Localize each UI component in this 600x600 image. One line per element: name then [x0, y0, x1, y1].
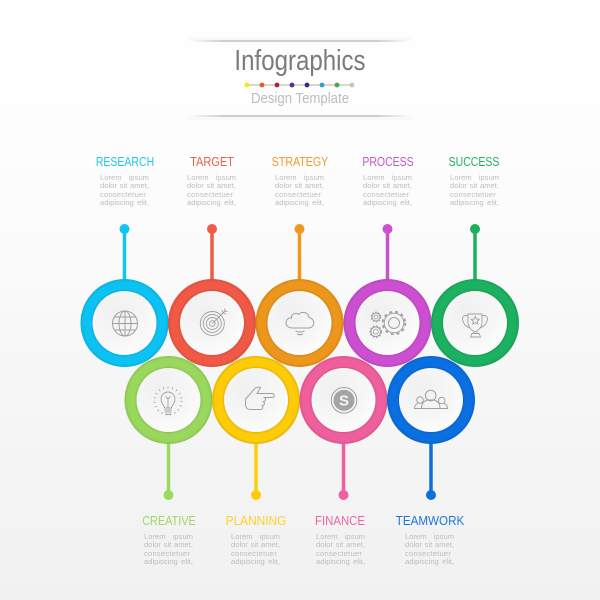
text: strategy body: consectetuer: [275, 190, 321, 199]
text: creative body: dolor sit amet,: [144, 540, 193, 549]
icon: pointing hand: [246, 387, 274, 410]
text: success body: Lorem ipsum: [450, 172, 499, 182]
subheading: Design Template: Design Template: [251, 90, 349, 107]
text: target body: dolor sit amet,: [187, 181, 236, 190]
text: success body: consectetuer: [450, 190, 496, 199]
node: target: [168, 224, 256, 367]
text: finance body: dolor sit amet,: [316, 540, 365, 549]
text: finance body: adipiscing elit,: [316, 557, 365, 566]
node: creative: [124, 356, 212, 500]
icon: lightbulb: [154, 388, 182, 414]
title block: [194, 40, 406, 117]
text: teamwork body: consectetuer: [405, 549, 451, 558]
text: creative body: [144, 532, 193, 566]
colored dot line: [244, 82, 354, 88]
text: strategy body: adipiscing elit,: [275, 198, 324, 207]
text: process body: [363, 172, 412, 207]
label: TARGET: TARGET: [190, 155, 234, 169]
label: FINANCE: FINANCE: [315, 514, 365, 528]
icon: dollar coin: [331, 388, 357, 413]
text: creative body: consectetuer: [144, 549, 190, 558]
text: success body: [450, 172, 499, 207]
label: RESEARCH: RESEARCH: [96, 155, 154, 169]
label: PLANNING: PLANNING: [225, 514, 286, 528]
node: planning: [212, 356, 300, 500]
node: finance: [300, 356, 388, 500]
text: teamwork body: dolor sit amet,: [405, 540, 454, 549]
text: target body: adipiscing elit,: [187, 198, 236, 207]
icon: team: [414, 390, 448, 408]
text: strategy body: Lorem ipsum: [275, 172, 324, 182]
label: PROCESS: PROCESS: [362, 155, 413, 169]
text: process body: dolor sit amet,: [363, 181, 412, 190]
text: research body: adipiscing elit,: [100, 198, 149, 207]
text: planning body: Lorem ipsum: [231, 532, 280, 540]
text: teamwork body: Lorem ipsum: [405, 532, 454, 540]
text: process body: Lorem ipsum: [363, 172, 412, 182]
icon: dollar coin: S: [339, 392, 349, 410]
text: finance body: [316, 532, 365, 566]
icon: globe: [112, 311, 138, 336]
text: creative body: Lorem ipsum: [144, 532, 193, 540]
bottom title rule: [188, 115, 412, 117]
label: TEAMWORK: TEAMWORK: [395, 514, 464, 528]
node: strategy: [256, 224, 344, 367]
text: planning body: [231, 532, 280, 566]
heading: Infographics: Infographics: [234, 45, 366, 77]
text: finance body: Lorem ipsum: [316, 532, 365, 540]
node: teamwork: [387, 356, 475, 500]
text: teamwork body: [405, 532, 454, 566]
text: research body: consectetuer: [100, 190, 146, 199]
label: CREATIVE: CREATIVE: [142, 514, 196, 528]
node: success: [431, 224, 519, 367]
icon: gears: [370, 312, 405, 337]
text: strategy body: dolor sit amet,: [275, 181, 324, 190]
text: success body: adipiscing elit,: [450, 198, 499, 207]
text: teamwork body: adipiscing elit,: [405, 557, 454, 566]
top title rule: [188, 40, 412, 42]
text: research body: [100, 172, 149, 207]
text: target body: consectetuer: [187, 190, 233, 199]
text: target body: Lorem ipsum: [187, 172, 236, 182]
text: planning body: consectetuer: [231, 549, 277, 558]
text: process body: adipiscing elit,: [363, 198, 412, 207]
icon: target: [200, 308, 228, 336]
icon: cloud: [286, 312, 314, 335]
text: success body: dolor sit amet,: [450, 181, 499, 190]
text: planning body: dolor sit amet,: [231, 540, 280, 549]
text: target body: [187, 172, 236, 207]
text: creative body: adipiscing elit,: [144, 557, 193, 566]
text: research body: Lorem ipsum: [100, 172, 149, 182]
text: finance body: consectetuer: [316, 549, 362, 558]
node: process: [344, 224, 432, 367]
text: planning body: adipiscing elit,: [231, 557, 280, 566]
label: STRATEGY: STRATEGY: [271, 155, 328, 169]
node: research: [80, 224, 168, 367]
icon: trophy: [463, 314, 487, 337]
text: research body: dolor sit amet,: [100, 181, 149, 190]
label: SUCCESS: SUCCESS: [449, 155, 499, 169]
text: strategy body: [275, 172, 324, 207]
text: process body: consectetuer: [363, 190, 409, 199]
